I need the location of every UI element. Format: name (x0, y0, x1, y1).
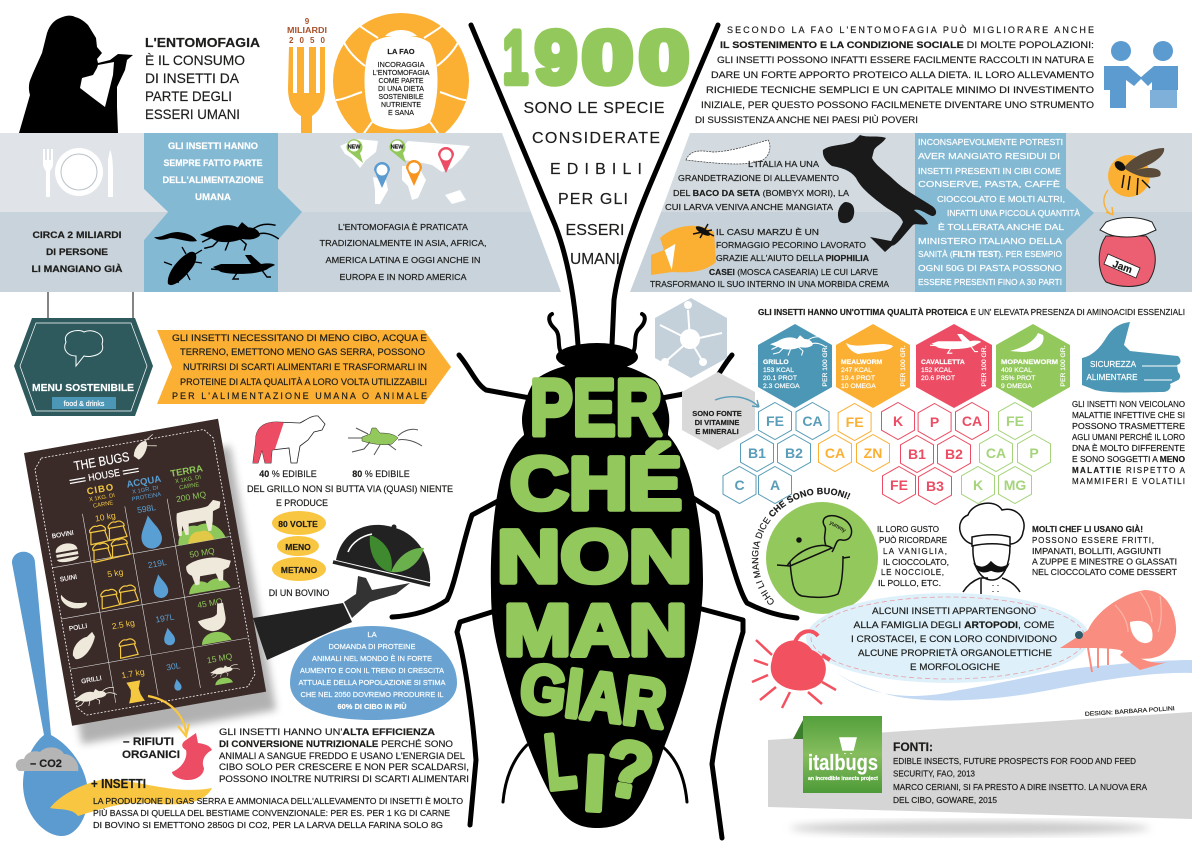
fork with 9 miliardi 2050: 9 (305, 17, 310, 26)
text: baco da seta: L'ITALIA HA UNA (748, 160, 820, 169)
hexagon: cavalletta: CAVALLETTA (921, 359, 965, 366)
mineral hexagons: cavalletta (882, 402, 988, 504)
woman eating silhouette (19, 16, 133, 133)
yellow badges: 80 volte meno metano: DI UN BOVINO (269, 588, 329, 598)
text: baco da seta: GRANDETRAZIONE DI ALLEVAMENTO (678, 174, 839, 183)
text: entomofagia is practised: AMERICA LATINA E OGGI ANCHE IN (326, 255, 480, 265)
row: grilli (70, 650, 242, 713)
text: fao sustenance: INIZIALE, PER QUESTO POSSONO FACILMENETE DIVENTARE UNO STRUMENTO (701, 100, 1094, 110)
text: taste: IL POLLO, ETC. (878, 579, 941, 588)
mineral hexagons: mopaneworm: P (1029, 445, 1039, 461)
sources banner: FONTI: (893, 740, 933, 754)
larva and plus insetti (50, 776, 212, 816)
callout: arthropods: ALCUNE PROPRIETÀ ORGANOLETTICHE (858, 648, 1052, 659)
grey hexagon: vitamins and minerals: E MINERALI (695, 427, 739, 436)
row: suini: SUINI (59, 574, 78, 584)
text: greenhouse gases (93, 797, 463, 830)
mineral hexagons: cavalletta: FE (890, 477, 908, 493)
title: 1900: 9 (535, 16, 577, 99)
column headers: TERRA (170, 463, 204, 480)
text: baco da seta (665, 160, 850, 212)
hexagon: cavalletta (916, 324, 992, 408)
hexagon: grillo: 153 KCAL (763, 367, 794, 374)
hexagon: mealworm: MEALWORM (841, 359, 882, 366)
text: chefs use them (1032, 525, 1177, 577)
text: conversion efficiency: CIBO SOLO PER CRESCERE E NON PER SCALDARSI, (219, 762, 469, 772)
callout: arthropods: ALCUNI INSETTI APPARTENGONO (872, 606, 1036, 617)
column headers: CARNE (93, 500, 114, 510)
text: fao sustenance: IL SOSTENIMENTO E LA CONDIZIONE SOCIALE DI MOLTE POPOLAZIONI: (720, 40, 1094, 50)
text: casu marzu: TRASFORMANO IL SUO INTERNO IN UNA MORBIDA CREMA (650, 280, 890, 289)
pin: pink (438, 147, 454, 173)
orange arrow: sustainability text: TERRENO, EMETTONO MENO GAS SERRA, POSSONO (180, 347, 425, 357)
icon: jam jar: Jam (1111, 259, 1134, 276)
row: grilli: GRILLI (81, 675, 102, 685)
text: species considered edible: SONO LE SPECIE (524, 100, 664, 117)
column headers (85, 463, 207, 510)
text: no infectious diseases: MALATTIE INFETTIVE CHE SI (1072, 411, 1185, 420)
yellow badges: 80 volte meno metano: MENO (285, 542, 311, 552)
text: no infectious diseases: DNA È MOLTO DIFFERENTE (1072, 444, 1185, 453)
orange arrow: sustainability text: PROTEINE DI ALTA QUALITÀ A LORO VOLTA UTILIZZABILI (180, 377, 427, 387)
mineral hexagons: cavalletta: CA (962, 413, 982, 429)
text: insects always part of diet: DELL'ALIMENTAZIONE (162, 175, 264, 185)
text: no infectious diseases: GLI INSETTI NON VEICOLANO (1072, 400, 1185, 409)
text: taste: IL CIOCCOLATO, (883, 558, 949, 567)
blue ellipse: protein demand: DOMANDA DI PROTEINE (328, 642, 416, 651)
sources banner (768, 712, 1192, 835)
world map with pins (340, 139, 470, 204)
text: casu marzu: CASEI (MOSCA CASEARIA) LE CUI LARVE (709, 268, 878, 277)
row: suini: 50 MQ (189, 545, 216, 560)
icon: handshake with briefcase (1104, 41, 1178, 108)
grey hexagon: vitamins and minerals (682, 372, 759, 450)
hexagon: mopaneworm: PER 100 GR. (1060, 345, 1067, 387)
headline: perché non mangiarli (497, 363, 692, 828)
icon: shrimp (1060, 590, 1176, 672)
hexagon: grillo: GRILLO (763, 359, 789, 366)
pin: green new 1: NEW (348, 144, 361, 150)
row: bovini: BOVINI (51, 530, 74, 540)
text: chefs use them: MOLTI CHEF LI USANO GIÀ! (1032, 525, 1143, 534)
sources banner: SECURITY, FAO, 2013 (893, 770, 976, 778)
text: conversion efficiency: DI CONVERSIONE NUTRIZIONALE PERCHÉ SONO (219, 739, 453, 749)
text: entomofagia is practised: TRADIZIONALMENTE IN ASIA, AFRICA, (320, 238, 486, 248)
text: chefs use them: NEL CIOCCOLATO COME DESSERT (1032, 568, 1177, 577)
row: polli: 197L (155, 611, 175, 625)
mineral hexagons: grillo: CA (802, 413, 823, 429)
text: no infectious diseases (1072, 400, 1186, 486)
hexagon: mopaneworm (996, 324, 1070, 408)
callout: arthropods: I CROSTACEI, E CON LORO CONDIVIDONO (851, 634, 1057, 645)
text: hidden insects in food: AVER MANGIATO RESIDUI DI (918, 152, 1060, 161)
mineral hexagons: grillo: B2 (785, 445, 803, 461)
arrow: yellow to organic waste (148, 696, 189, 736)
text: fao sustenance: DARE UN FORTE APPORTO PROTEICO ALLA DIETA. IL LORO ALLEVAMENTO (711, 70, 1094, 80)
hexagon: mealworm: 19.4 PROT (841, 375, 875, 382)
text: fao sustenance: GLI INSETTI POSSONO INFATTI ESSERE FACILMENTE RACCOLTI IN NATURA E (717, 55, 1094, 65)
hexagon: mopaneworm: 35% PROT (1001, 375, 1035, 382)
text: chefs use them: IMPANATI, BOLLITI, AGGIUNTI (1032, 547, 1161, 556)
text: edible percentages: E PRODUCE (276, 498, 328, 508)
text: baco da seta: CUI LARVA VENIVA ANCHE MANGIATA (665, 203, 834, 212)
title: 1900 (503, 16, 689, 99)
hexagon: cavalletta: PER 100 GR. (981, 345, 988, 387)
menu card: the bugs house (24, 419, 276, 744)
pin: orange (406, 160, 422, 186)
hexagon: cavalletta: 20.6 PROT (921, 375, 955, 382)
hexagon: grillo (758, 324, 832, 408)
mineral hexagons: grillo: A (770, 477, 780, 493)
hand: food safety (1082, 322, 1181, 392)
text: entomofagia is practised (320, 222, 486, 282)
blue ellipse: protein demand: LA (367, 630, 378, 639)
card heading: HOUSE (87, 468, 121, 484)
fork with 9 miliardi 2050: MILIARDI (287, 26, 327, 35)
yellow badges: 80 volte meno metano (269, 511, 329, 598)
text: conversion efficiency (219, 727, 469, 784)
band left: background (0, 133, 561, 292)
text: 2 miliardi di persone: DI PERSONE (46, 247, 108, 257)
icon: cheese with fly (651, 224, 716, 275)
icon: waiter hand with cloche and leaves (253, 524, 430, 660)
antennae (471, 25, 718, 345)
row: bovini: 200 MQ (175, 489, 207, 504)
text: chefs use them: A ZUPPE E MINESTRE O GLASSATI (1032, 558, 1177, 566)
hexagon: mealworm: 10 OMEGA (841, 383, 876, 390)
mineral hexagons: cavalletta: P (930, 414, 939, 430)
card heading (64, 434, 161, 487)
blue ellipse: protein demand: CHE NEL 2050 DOVREMO PRODURRE IL (300, 690, 444, 699)
icon: chef (960, 503, 1024, 594)
sources banner: EDIBLE INSECTS, FUTURE PROSPECTS FOR FOOD AND FEED (893, 757, 1136, 766)
mineral hexagons: cavalletta: B3 (926, 478, 944, 494)
text: no infectious diseases: MALATTIE RISPETTO A (1072, 466, 1186, 475)
sources banner: DEL CIBO, GOWARE, 2015 (893, 796, 998, 805)
icon: jam jar (1099, 218, 1156, 286)
fork with 9 miliardi 2050: 2050 (289, 36, 326, 45)
headline: perché non mangiarli: PER (530, 363, 662, 452)
callout: arthropods (806, 593, 1090, 683)
text: hidden insects in food: CONSERVE, PASTA, CAFFÈ (918, 180, 1060, 189)
callout: arthropods: ALLA FAMIGLIA DEGLI ARTOPODI , COME (854, 620, 1054, 631)
mineral hexagons: grillo: B1 (748, 445, 766, 461)
FAO plate with bug: LA FAO (387, 47, 415, 56)
text: hidden insects in food (918, 138, 1081, 287)
text: rifiuti organici (122, 736, 180, 761)
row: polli: POLLI (68, 623, 88, 633)
text: 2 miliardi di persone: CIRCA 2 MILIARDI (32, 230, 122, 240)
text: insects always part of diet: UMANA (195, 192, 232, 202)
text: hidden insects in food: MINISTERO ITALIANO DELLA (918, 237, 1063, 246)
headline: perché non mangiarli: NON (497, 515, 692, 598)
yellow badges: 80 volte meno metano: 80 VOLTE (278, 519, 318, 529)
text: insects always part of diet (162, 141, 264, 202)
text: insects always part of diet: GLI INSETTI HANNO (168, 141, 258, 151)
row: bovini (48, 487, 227, 569)
text: taste (877, 525, 949, 588)
hexagon: mopaneworm: MOPANEWORM (1001, 359, 1058, 366)
text: insects always part of diet: SEMPRE FATTO PARTE (164, 158, 262, 168)
headline: perché non mangiarli: I (582, 739, 608, 828)
FAO plate with bug (333, 13, 469, 149)
text: greenhouse gases: PIÙ BASSA DI QUELLA DEL BESTIAME CONVENZIONALE: PER ES. PER 1 KG DI CARNE (93, 809, 450, 818)
row: bovini: 598L (136, 502, 157, 515)
text: entomofagia is practised: L'ENTOMOFAGIA È PRATICATA (338, 222, 468, 232)
text: species considered edible: ESSERI (566, 222, 624, 239)
blue ellipse: protein demand: ATTUALE DELLA POPOLAZIONE SI STIMA (298, 678, 446, 687)
text: 2 miliardi di persone: LI MANGIANO GIÀ (32, 264, 123, 274)
text: conversion efficiency: ANIMALI A SANGUE FREDDO E USANO L'ENERGIA DEL (219, 751, 465, 761)
text: species considered edible: CONSIDERATE (532, 130, 660, 147)
mineral hexagons: cavalletta: B2 (945, 446, 963, 462)
curved caption: chi li mangia: CHI LI MANGIA DICE CHE SONO BUONI! (752, 488, 850, 605)
mineral hexagons: cavalletta: K (893, 413, 903, 429)
text: greenhouse gases: DI BOVINO SI EMETTONO 2850G DI CO2, PER LA LARVA DELLA FARINA SOLO 8G (93, 821, 443, 830)
title: 1900: 0 (639, 16, 689, 99)
icon: fly on orange circle (1104, 148, 1164, 215)
callout: arthropods: E MORFOLOGICHE (910, 662, 1000, 673)
intro text: entomofagia: ESSERI UMANI (145, 106, 240, 122)
FAO plate with bug: DI UNA DIETA (378, 84, 424, 93)
text: species considered edible: EDIBILI (550, 161, 642, 178)
text: species considered edible (524, 100, 664, 268)
FAO plate with bug: L'ENTOMOFAGIA (372, 68, 430, 77)
hexagon: grillo: 2.3 OMEGA (763, 383, 800, 390)
column headers: PROTEINA (131, 492, 162, 503)
band right: background (630, 133, 1192, 292)
row: grilli: 15 MQ (206, 651, 233, 665)
hexagon: mealworm: 247 KCAL (841, 367, 872, 374)
text: rifiuti organici: ORGANICI (122, 749, 180, 761)
FAO plate with bug: NUTRIENTE (381, 100, 421, 109)
text: taste: LA VANIGLIA, (883, 547, 947, 556)
headline: perché non mangiarli: CHÉ (510, 442, 682, 525)
row: polli (67, 595, 232, 667)
text: hidden insects in food: ESSERE PRESENTI FINO A 30 PARTI (918, 278, 1062, 287)
mineral hexagons: mopaneworm (962, 402, 1050, 504)
intro text: entomofagia: PARTE DEGLI (145, 88, 232, 104)
column headers: X 1KG. DI (89, 493, 116, 503)
mineral hexagons: mopaneworm: FE (1006, 413, 1024, 429)
mineral hexagons: grillo: C (734, 477, 745, 493)
text: edible percentages: DEL GRILLO NON SI BUTTA VIA (QUASI) NIENTE (247, 484, 453, 494)
text: chefs use them: POSSONO ESSERE FRITTI, (1032, 536, 1154, 545)
row: grilli: 30L (165, 660, 181, 672)
hanging sign: menu sostenibile: food & drinks (64, 401, 105, 408)
orange arrow: sustainability text: PER L'ALIMENTAZIONE UMANA O ANIMALE (172, 391, 427, 401)
orange arrow: sustainability text: GLI INSETTI NECESSITANO DI MENO CIBO, ACQUA E (172, 333, 427, 343)
text: entomofagia is practised: EUROPA E IN NORD AMERICA (340, 272, 467, 282)
text: no infectious diseases: MAMMIFERI E VOLATILI (1072, 477, 1185, 486)
card heading: THE BUGS (73, 449, 131, 473)
intro text: entomofagia: L'ENTOMOFAGIA (145, 35, 261, 50)
FAO plate with bug: COME PARTE (378, 76, 424, 85)
text: hidden insects in food: CIOCCOLATO E MOLTI ALTRI, (937, 195, 1065, 204)
headline: perché non mangiarli: L (541, 716, 580, 807)
icon: cricket 80% edible (348, 428, 422, 455)
row: suini (57, 543, 235, 617)
text: taste: LE NOCCIOLE, (881, 568, 944, 577)
fork with 9 miliardi 2050 (287, 17, 327, 133)
green circle with pot: yummy (828, 520, 847, 534)
cloud: minus co2: – CO2 (30, 758, 62, 770)
mineral hexagons: mealworm (818, 404, 890, 472)
FAO plate with bug: E SANA (388, 108, 414, 117)
hexagon: mealworm: PER 100 GR. (900, 345, 907, 387)
text: fao sustenance: DI SUSSISTENZA ANCHE NEI PAESI PIÙ POVERI (695, 115, 918, 125)
orange arrow: sustainability text: NUTRIRSI DI SCARTI ALIMENTARI E TRASFORMARLI IN (183, 362, 427, 372)
text: casu marzu (650, 228, 890, 289)
column headers: CARNE (179, 482, 200, 492)
text: fao sustenance: RICHIEDE TECNICHE SEMPLICI E UN CAPITALE MINIMO DI INVESTIMENTO (706, 85, 1094, 95)
hexagon: mopaneworm: 409 KCAL (1001, 367, 1032, 374)
row: polli: 2.5 kg (111, 617, 136, 631)
column headers: ACQUA (126, 474, 162, 491)
title: 1900: 1 (503, 16, 528, 99)
headline: perché non mangiarli: GIAR (516, 650, 670, 743)
FAO plate with bug: SOSTENIBILE (378, 92, 424, 101)
hand: food safety: ALIMENTARE (1086, 373, 1138, 382)
text: hidden insects in food: INFATTI UNA PICCOLA QUANTITÀ (947, 209, 1081, 218)
intro text: entomofagia (145, 35, 261, 122)
spoon (12, 552, 88, 836)
legs (392, 314, 797, 838)
mineral hexagons: mopaneworm: MG (1004, 477, 1026, 493)
icon: grey network hexagon (655, 298, 727, 378)
text: 2 miliardi di persone (32, 230, 123, 274)
mineral hexagons: grillo: FE (766, 413, 784, 429)
yellow badges: 80 volte meno metano: METANO (281, 565, 317, 575)
text: casu marzu: GRAZIE ALL'AIUTO DELLA PIOPHILIA (716, 254, 869, 263)
row: suini: 5 kg (106, 567, 124, 579)
column headers: CIBO (86, 482, 115, 498)
text: taste: PUÒ RICORDARE (879, 536, 947, 545)
text: casu marzu: FORMAGGIO PECORINO LAVORATO (716, 241, 866, 250)
grey hexagon: vitamins and minerals: SONO FONTE (692, 409, 742, 418)
text: casu marzu: IL CASU MARZU È UN (716, 228, 819, 237)
text: hidden insects in food: SANITÀ (FILTH TEST). PER ESEMPIO (918, 250, 1062, 259)
mineral hexagons: grillo (723, 402, 829, 504)
larva and plus insetti: + INSETTI (91, 776, 146, 791)
sources banner: MARCO CERIANI, SI FA PRESTO A DIRE INSETTO. LA NUOVA ERA (893, 783, 1148, 792)
text: rifiuti organici: – RIFIUTI (123, 736, 174, 748)
icon: crab (752, 631, 836, 708)
hanging sign: menu sostenibile: MENU SOSTENIBILE (32, 382, 134, 394)
row: grilli: 1.7 kg (121, 666, 145, 680)
headline: perché non mangiarli: ? (599, 722, 659, 817)
blue ellipse: protein demand: 60% DI CIBO IN PIÙ (338, 702, 407, 711)
hexagon: grillo: PER 100 GR. (822, 345, 829, 387)
text: hidden insects in food: È TOLLERATA ANCHE DAL (938, 223, 1065, 232)
icon: four edible insects (154, 222, 279, 285)
logo: italbugs: an incredible insects project (808, 776, 878, 782)
intro text: entomofagia: È IL CONSUMO (145, 52, 245, 68)
blue ellipse: protein demand: AUMENTO E CON IL TREND DI CRESCITA (300, 666, 445, 675)
text: species considered edible: UMANI (570, 251, 620, 268)
text: hidden insects in food: INSETTI PRESENTI IN CIBI COME (918, 167, 1061, 176)
text: no infectious diseases: E SONO SOGGETTI A MENO (1072, 455, 1185, 464)
cloud: minus co2 (16, 747, 78, 771)
text: greenhouse gases: LA PRODUZIONE DI GAS SERRA E AMMONIACA DELL'ALLEVAMENTO DI INSETTI È MOLTO (93, 797, 463, 806)
blue wave (833, 660, 1192, 700)
text: no infectious diseases: POSSONO TRASMETTERE (1072, 422, 1185, 431)
text: edible percentages: 80 % EDIBILE (352, 469, 410, 479)
headline: perché non mangiarli: MAN (504, 591, 687, 671)
text: taste: IL LORO GUSTO (877, 525, 939, 534)
hexagon: cavalletta: 152 KCAL (921, 367, 952, 374)
hexagon: grillo: 20.1 PROT (763, 375, 797, 382)
text: hidden insects in food: INCONSAPEVOLMENTE POTRESTI (918, 138, 1063, 147)
mineral hexagons: cavalletta: B1 (908, 446, 926, 462)
table grid (44, 489, 255, 710)
hanging sign: menu sostenibile (14, 292, 153, 416)
mineral hexagons: mopaneworm: CA (986, 445, 1006, 461)
icon: cow 40% edible (253, 416, 325, 463)
map of Italy (823, 135, 936, 252)
text: fao sustenance: SECONDO LA FAO L'ENTOMOFAGIA PUÒ MIGLIORARE ANCHE (727, 25, 1094, 35)
orange arrow: sustainability text (157, 330, 451, 404)
row: polli: 45 MQ (196, 596, 224, 610)
blue ellipse: protein demand: ANIMALI NEL MONDO È IN FORTE (312, 654, 432, 663)
icon: plate and cutlery (43, 148, 113, 197)
column headers: X 1KG. DI (175, 475, 202, 485)
grey hexagon: vitamins and minerals: DI VITAMINE (695, 418, 739, 427)
icon: apple core (172, 733, 212, 780)
FAO plate with bug: INCORAGGIA (378, 60, 424, 69)
text: fao sustenance (695, 25, 1094, 125)
text: hidden insects in food: OGNI 50G DI PASTA POSSONO (918, 264, 1062, 273)
hexagon: mopaneworm: 9 OMEGA (1001, 383, 1032, 390)
text: design credit: DESIGN: BARBARA POLLINI (1085, 706, 1175, 718)
text: conversion efficiency: GLI INSETTI HANNO UN' ALTA EFFICIENZA (219, 727, 436, 737)
mineral hexagons: mealworm: FE (846, 414, 864, 430)
mineral hexagons: mealworm: CA (825, 445, 845, 461)
column headers: X 1GR. DI (132, 485, 159, 496)
row: bovini: 10 kg (94, 510, 117, 524)
text: species considered edible: PER GLI (558, 191, 628, 208)
text: no infectious diseases: AGLI UMANI PERCHÉ IL LORO (1072, 433, 1185, 442)
hand: food safety: SICUREZZA (1090, 360, 1137, 369)
logo: italbugs: italbugs (808, 750, 878, 775)
heading: protein quality: GLI INSETTI HANNO UN'OTTIMA QUALITÀ PROTEICA E UN' ELEVATA PRESENZA DI AMINOACIDI ESSENZIALI (758, 308, 1185, 317)
text: conversion efficiency: POSSONO INOLTRE NUTRIRSI DI SCARTI ALIMENTARI (219, 774, 469, 784)
text: baco da seta: DEL BACO DA SETA (BOMBYX MORI), LA (673, 189, 850, 198)
pin: blue (374, 162, 390, 188)
text: edible percentages (247, 469, 453, 508)
green circle with pot (766, 502, 878, 614)
blue ellipse: protein demand (290, 626, 457, 720)
logo: italbugs (793, 716, 882, 793)
mineral hexagons: mealworm: ZN (864, 445, 882, 461)
row: suini: 219L (147, 557, 168, 570)
title: 1900: 0 (582, 16, 633, 99)
hexagon: mealworm (836, 324, 910, 408)
cockroach body (392, 314, 797, 838)
icon: silkworm (686, 140, 770, 164)
text: edible percentages: 40 % EDIBILE (259, 469, 317, 479)
mineral hexagons: mopaneworm: K (973, 477, 983, 493)
pin: green new 2: NEW (391, 144, 404, 150)
intro text: entomofagia: DI INSETTI DA (145, 70, 240, 86)
